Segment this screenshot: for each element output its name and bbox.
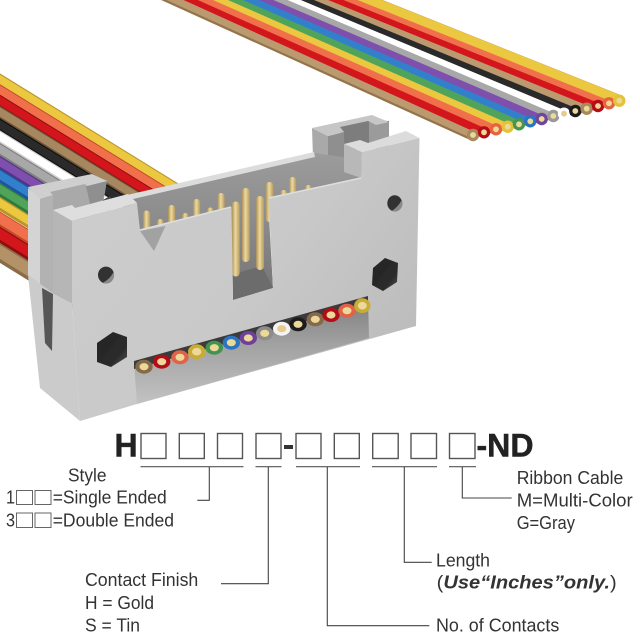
front left ear top [53,194,137,221]
text: style: 3 [6,510,15,531]
back wall lip [127,152,315,199]
notch floor [233,266,273,300]
text: style: =Double Ended [53,510,174,531]
free wire ends [467,94,626,141]
connector front face [72,138,420,421]
round mounting hole right [387,195,403,212]
cable entry recess [134,297,369,404]
text: contact finish: H = Gold [85,592,154,613]
polarity triangle [140,226,166,251]
part number header [114,428,534,464]
hex hole left [97,332,127,367]
text: length: Length [436,550,490,571]
back right latch ear [312,115,389,186]
hex hole right [372,258,398,291]
lower left side face [28,275,80,421]
front left ear side [53,210,72,303]
bold prefix H: H [114,428,138,464]
front right ear top [344,131,420,152]
text: contact finish: S = Tin [85,615,140,636]
dash [284,445,293,449]
group underlines [140,466,476,468]
IDC connector body [28,115,420,421]
short header pins [143,177,312,239]
front wall top highlights [140,178,361,230]
text: length: (Use“Inches”only. ) [437,571,617,592]
recess top shadow [134,296,368,369]
text: length [436,550,617,592]
wire ends in connector [135,298,370,374]
text: style: 1 [6,487,15,508]
free-end ribbon cable [153,0,620,135]
round mounting hole left [98,267,114,283]
part number boxes [141,434,475,458]
side latch slot [42,288,53,351]
text: style: Style [68,465,106,486]
leader: style [197,467,209,500]
text: ribbon cable: Ribbon Cable [517,467,623,488]
suffix -ND: -ND [476,428,534,464]
front right ear side [344,144,362,178]
leader: number of contacts [327,467,429,626]
tall pins in notch [232,182,274,276]
text: contact finish: Contact Finish [85,569,198,590]
text: contact finish [85,569,198,636]
leader: length [404,467,432,562]
text: ribbon cable [517,467,633,533]
connector-side ribbon cable [0,77,190,370]
back left latch ear [28,174,112,294]
leader: ribbon cable [462,467,512,498]
text: ribbon cable: G=Gray [517,512,576,533]
text: number of contacts: No. of Contacts [436,615,559,636]
text: ribbon cable: M=Multi-Color [517,490,633,511]
leader: contact finish [221,467,268,584]
text: style [6,465,174,531]
inner wall of shroud [128,153,362,300]
text: style: =Single Ended [53,487,167,508]
